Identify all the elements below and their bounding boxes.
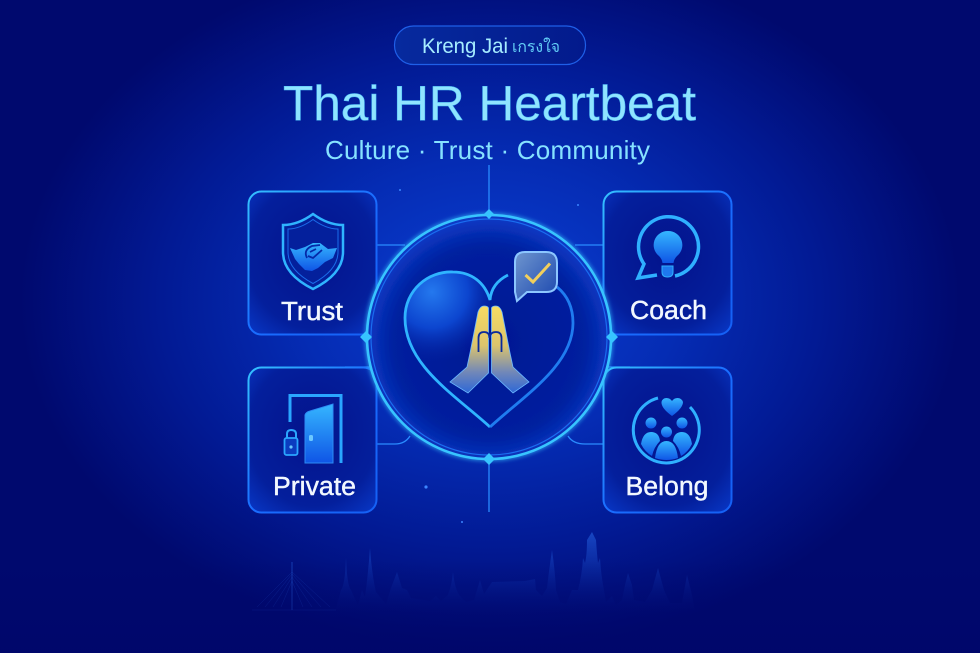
label: Trust: Trust bbox=[281, 298, 343, 326]
icon: praying hands bbox=[450, 306, 529, 393]
bottom fade bbox=[0, 560, 980, 653]
pill badge: Kreng Jai: เกรงใจ bbox=[512, 37, 560, 56]
icon: speech bubble with lightbulb bbox=[638, 217, 699, 278]
central circle bbox=[360, 209, 618, 465]
panel: Belong bbox=[604, 368, 732, 512]
connector lines bbox=[345, 165, 630, 512]
icon: family in circle with heart bbox=[633, 398, 699, 463]
icon: check speech bubble bbox=[515, 252, 557, 301]
label: Belong: Belong bbox=[626, 473, 708, 501]
icon: shield with handshake bbox=[283, 214, 343, 289]
pill badge: Kreng Jai: Kreng Jai bbox=[422, 35, 508, 58]
subtitle: Culture · Trust · Community bbox=[325, 135, 650, 165]
faint stars bbox=[399, 189, 579, 523]
label: Coach: Coach bbox=[630, 297, 707, 325]
label: Private: Private bbox=[273, 473, 356, 501]
panel: Private bbox=[248, 368, 376, 512]
pill badge: Kreng Jai bbox=[394, 26, 586, 64]
skyline silhouette bbox=[252, 532, 695, 612]
icon: door with padlock bbox=[284, 396, 341, 463]
panel: Coach bbox=[604, 192, 732, 334]
title: Thai HR Heartbeat bbox=[283, 76, 696, 131]
panel: Trust bbox=[248, 192, 376, 334]
heart outline bbox=[405, 272, 573, 427]
